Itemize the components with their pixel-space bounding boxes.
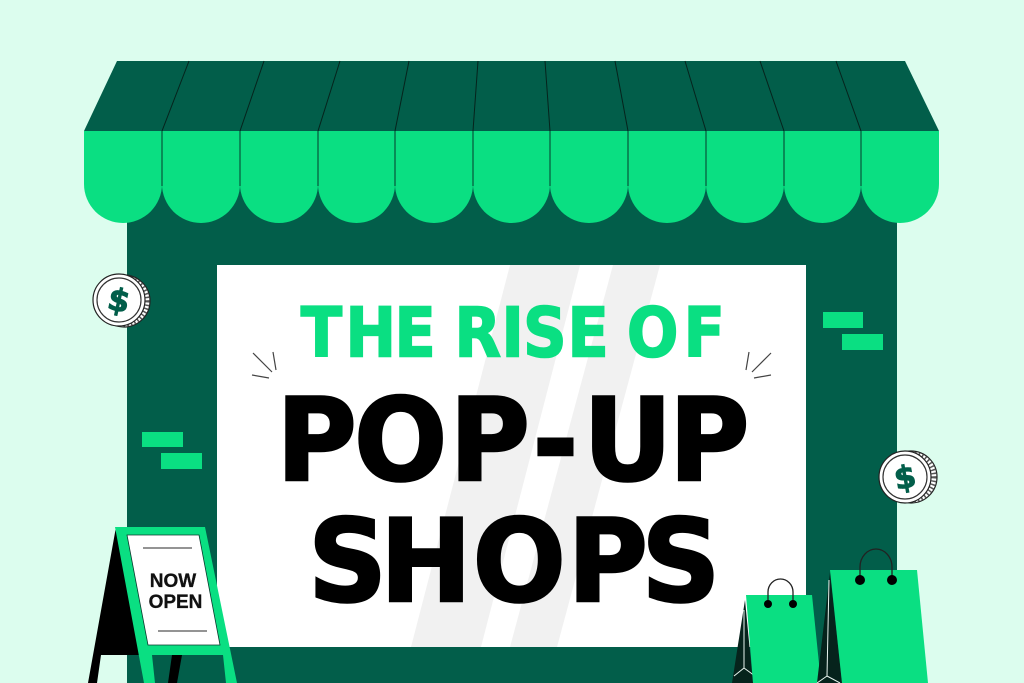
now open a-frame sign xyxy=(88,527,237,683)
awning scallops xyxy=(84,131,939,223)
small shopping bag xyxy=(732,579,821,683)
window panel xyxy=(217,265,806,647)
coin right xyxy=(879,451,937,503)
title line: the rise of: THE RISE OF xyxy=(301,294,725,373)
coin right: $ xyxy=(891,458,919,498)
bricks left xyxy=(142,432,202,469)
awning roof xyxy=(84,61,939,131)
awning xyxy=(84,61,939,223)
title line: pop-up: POP-UP xyxy=(276,375,749,508)
bricks right xyxy=(823,312,883,350)
coin left xyxy=(93,274,150,327)
sign green frame xyxy=(115,527,237,683)
large shopping bag xyxy=(817,549,928,683)
sign text: NOW xyxy=(150,571,196,592)
coin left: $ xyxy=(104,281,133,321)
sign text: OPEN xyxy=(149,592,202,613)
sign text xyxy=(149,571,202,613)
title line: shops: SHOPS xyxy=(308,496,720,629)
right sparkle lines xyxy=(746,352,771,378)
sign back legs xyxy=(88,527,142,683)
left sparkle lines xyxy=(252,352,276,378)
window glare stripes xyxy=(411,265,660,647)
shop wall xyxy=(127,131,897,683)
sign white panel xyxy=(127,535,220,645)
